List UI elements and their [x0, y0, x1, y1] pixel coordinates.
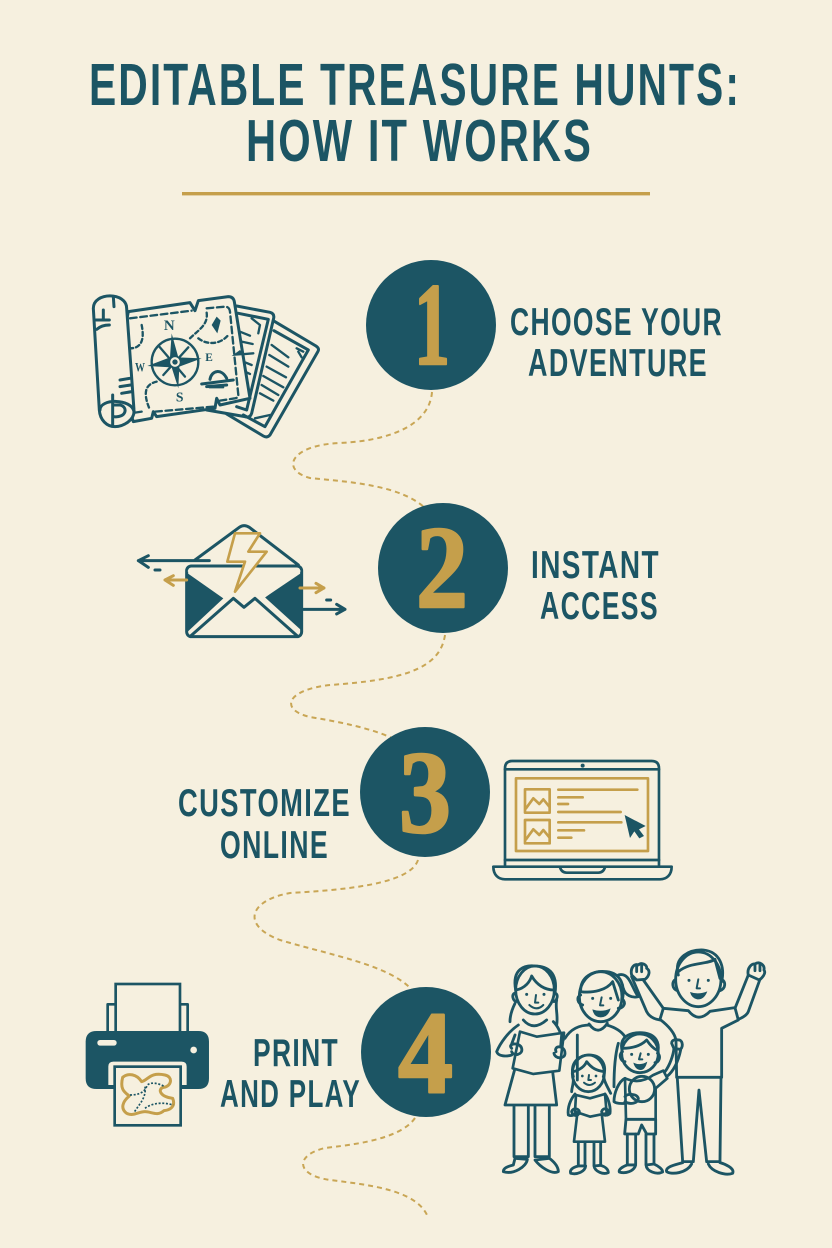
icon: printer with map [86, 984, 209, 1125]
dashed path 1 to 2 [293, 392, 432, 508]
step 1 number badge: 1 [414, 259, 450, 390]
step 3 label: CUSTOMIZE [178, 782, 351, 825]
step 1 number badge [366, 259, 496, 390]
step 2 label [531, 544, 660, 628]
illustration: family with maps [497, 950, 765, 1174]
icon: treasure map and sheets [93, 296, 319, 437]
step 2 label: INSTANT [531, 544, 660, 587]
step 4 number badge: 4 [398, 987, 453, 1118]
step 3 number badge [360, 727, 490, 858]
step 3 label [178, 782, 351, 867]
icon: treasure map and sheets: E [205, 352, 213, 364]
step 1 label [510, 301, 723, 385]
dashed path 3 to 4 [255, 860, 418, 990]
figure: young girl reading [568, 1055, 611, 1174]
icon: laptop with editor [493, 761, 672, 879]
step 4 label [220, 1032, 361, 1116]
icon: treasure map and sheets: W [135, 361, 145, 375]
step 1 label: ADVENTURE [528, 342, 708, 385]
figure: father [631, 950, 765, 1174]
icon: envelope with lightning bolt [138, 526, 345, 637]
step 2 number badge: 2 [416, 502, 468, 633]
step 3 label: ONLINE [220, 824, 329, 867]
title: HOW IT WORKS [246, 108, 593, 174]
figure: woman reading map [497, 966, 565, 1172]
step 4 label: AND PLAY [220, 1073, 361, 1116]
title [89, 52, 741, 174]
dashed path 4 to end [303, 1118, 427, 1215]
figure: mother with ponytail [565, 971, 638, 1087]
step 3 number badge: 3 [399, 727, 451, 858]
step 2 number badge [378, 502, 508, 633]
icon: treasure map and sheets: S [176, 390, 184, 405]
figure: boy with ball [614, 1033, 682, 1173]
step 1 label: CHOOSE YOUR [510, 301, 723, 344]
step 4 number badge [361, 987, 491, 1118]
step 2 label: ACCESS [540, 585, 659, 628]
icon: treasure map and sheets: N [164, 318, 175, 334]
step 4 label: PRINT [253, 1032, 339, 1075]
dashed path 2 to 3 [291, 635, 445, 738]
